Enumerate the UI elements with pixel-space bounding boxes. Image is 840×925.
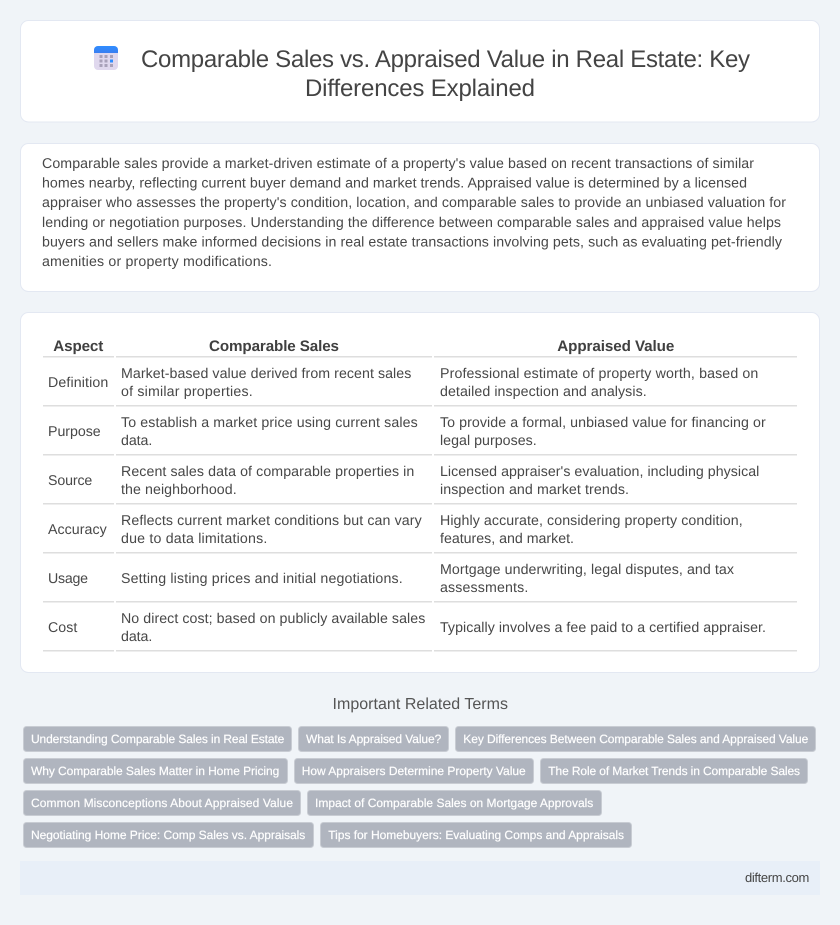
text block: introduction paragraph: appraiser who assesses the property's condition, location, and comparable sales to provide an unbiased valuation for (42, 195, 786, 211)
table row: Usage: Setting listing prices and initial negotiations. (121, 571, 403, 587)
tag (24, 822, 314, 848)
tag (298, 726, 448, 752)
panel: introduction (20, 144, 820, 292)
table row: Cost: Cost (48, 620, 77, 636)
table row: Source (48, 464, 759, 498)
title: Comparable Sales vs. Appraised Value in Real Estate: Key (141, 46, 750, 73)
tag (320, 822, 632, 848)
tag (456, 726, 816, 752)
tag: Key Differences Between Comparable Sales and Appraised Value (463, 732, 809, 746)
table row: Purpose: data. (121, 433, 152, 449)
text block: introduction paragraph: lending or negotiation purposes. Understanding the difference between comparable sales and appraised value helps (42, 215, 781, 231)
footer: difterm.com (745, 870, 809, 885)
tag (24, 790, 300, 816)
table row: Cost: data. (121, 629, 152, 645)
table row: Source: Source (48, 473, 92, 489)
table row: Cost (48, 611, 766, 645)
tag (294, 758, 534, 784)
table row: Definition (48, 366, 758, 400)
table row: Accuracy: Highly accurate, considering property condition, (440, 513, 743, 529)
tag (24, 726, 292, 752)
table row: Accuracy: Reflects current market conditions but can vary (121, 513, 423, 529)
table row: Cost: No direct cost; based on publicly available sales (121, 611, 425, 627)
tag (24, 758, 288, 784)
title (141, 46, 750, 102)
table row: Usage: assessments. (440, 580, 528, 596)
table row: Accuracy (48, 513, 743, 547)
table header row: Comparable Sales (209, 338, 339, 355)
table row: Source: Recent sales data of comparable properties in (121, 464, 414, 480)
icon: calendar (94, 46, 118, 70)
table row: Source: inspection and market trends. (440, 482, 629, 498)
table row: Purpose: legal purposes. (440, 433, 537, 449)
table row: Definition: detailed inspection and analysis. (440, 384, 647, 400)
tag: Tips for Homebuyers: Evaluating Comps and Appraisals (328, 828, 624, 842)
table row: Definition: Market-based value derived from recent sales (121, 366, 411, 382)
table row: Source: Licensed appraiser's evaluation, including physical (440, 464, 759, 480)
table row: Definition: Professional estimate of property worth, based on (440, 366, 758, 382)
tag: The Role of Market Trends in Comparable Sales (548, 764, 800, 778)
table row: Purpose: Purpose (48, 424, 101, 440)
panel: related term tags (24, 726, 816, 848)
table header row: Aspect (53, 338, 103, 355)
tag (540, 758, 808, 784)
table header row: Appraised Value (557, 338, 674, 355)
table row: Definition: Definition (48, 375, 108, 391)
text block: introduction paragraph: amenities or property modifications. (42, 254, 272, 270)
text block: introduction paragraph: Comparable sales provide a market-driven estimate of a property's value based on recent transactions of similar (42, 156, 754, 172)
panel: title header (20, 20, 820, 122)
table row: Accuracy: features, and market. (440, 531, 574, 547)
text block: introduction paragraph (42, 156, 786, 270)
table row: Usage (48, 562, 734, 596)
tag: What Is Appraised Value? (306, 732, 442, 746)
heading: related terms: Important Related Terms (332, 696, 508, 713)
table row: Source: the neighborhood. (121, 482, 237, 498)
tag: Common Misconceptions About Appraised Value (31, 796, 293, 810)
text block: introduction paragraph: buyers and sellers make informed decisions in real estate transactions involving pets, such as evaluating pet-friendly (42, 234, 783, 250)
table row: Purpose (48, 415, 766, 449)
tag: Understanding Comparable Sales in Real Estate (31, 732, 285, 746)
tag: How Appraisers Determine Property Value (302, 764, 526, 778)
tag: Why Comparable Sales Matter in Home Pricing (31, 764, 279, 778)
tag (308, 790, 602, 816)
panel: comparison table (20, 312, 820, 672)
table row: Purpose: To provide a formal, unbiased value for financing or (440, 415, 766, 431)
table row: Accuracy: Accuracy (48, 522, 108, 538)
table header row (53, 338, 674, 355)
table row: Cost: Typically involves a fee paid to a certified appraiser. (440, 620, 766, 636)
table row: Usage: Usage (48, 571, 88, 587)
table row: Usage: Mortgage underwriting, legal disputes, and tax (440, 562, 734, 578)
footer (20, 861, 820, 895)
text block: introduction paragraph: homes nearby, reflecting current buyer demand and market trends. Appraised value is determined by a licensed (42, 176, 747, 192)
table row: Definition: of similar properties. (121, 384, 253, 400)
table row: Accuracy: due to data limitations. (121, 531, 267, 547)
tag: Impact of Comparable Sales on Mortgage Approvals (315, 796, 593, 810)
table row: Purpose: To establish a market price using current sales (121, 415, 418, 431)
tag: Negotiating Home Price: Comp Sales vs. Appraisals (31, 828, 305, 842)
title: Differences Explained (305, 75, 535, 102)
